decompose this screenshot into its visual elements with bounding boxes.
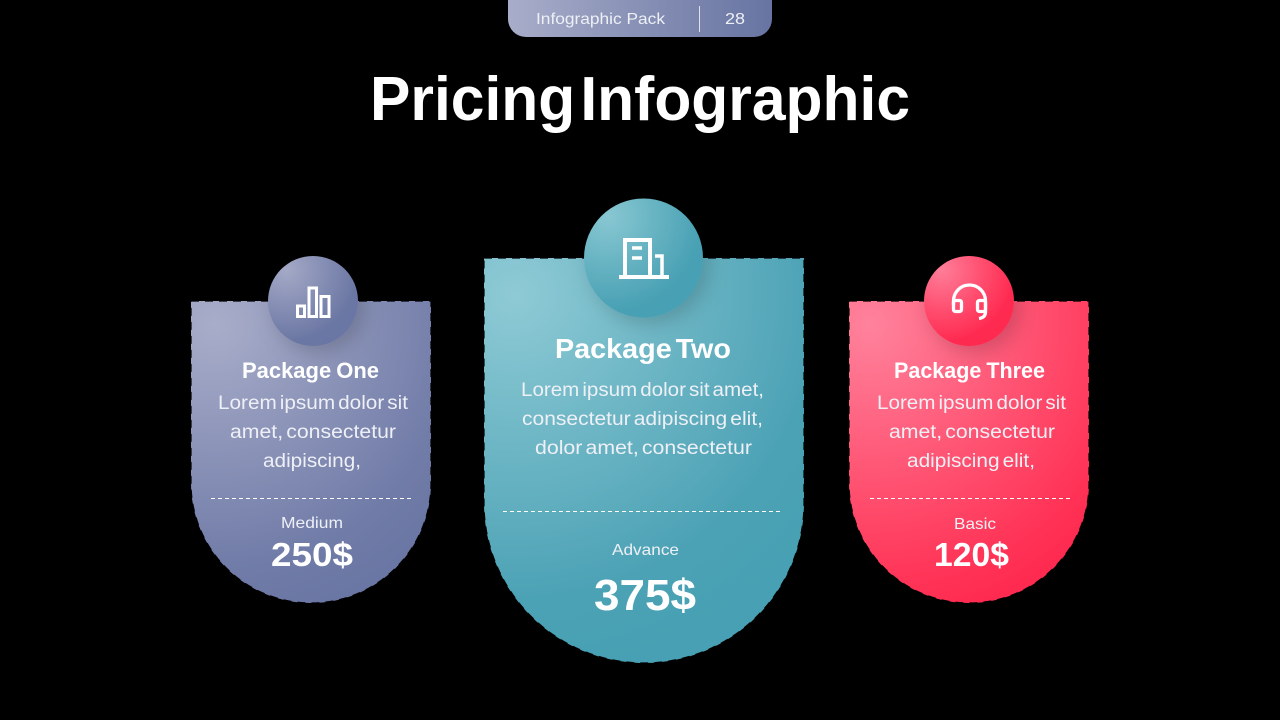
- icon: headset: [954, 285, 986, 318]
- tier label: advance: Advance: [612, 542, 679, 559]
- text block: package three: adipiscing elit,: [907, 451, 1035, 472]
- panel: package three: [849, 256, 1089, 603]
- panel: package two: [484, 198, 804, 663]
- text block: package two: consectetur adipiscing elit,: [522, 409, 763, 430]
- text block: package one: amet, consectetur: [230, 422, 397, 443]
- heading: package one: Package One: [242, 358, 379, 383]
- heading: package two: Package Two: [555, 333, 731, 364]
- text block: package one: Lorem ipsum dolor sit: [218, 393, 409, 414]
- text block: package three: Lorem ipsum dolor sit: [877, 393, 1067, 414]
- icon: bar chart: [298, 288, 329, 316]
- text block: package one: [218, 393, 409, 472]
- tab page number: 28: [725, 11, 745, 28]
- icon circle: package two: [584, 198, 703, 318]
- text block: package one: adipiscing,: [263, 451, 361, 472]
- price: 250$: 250$: [271, 536, 353, 573]
- tab label: Infographic Pack: [536, 11, 666, 28]
- heading: package three: Package Three: [894, 358, 1045, 383]
- text block: package three: [877, 393, 1067, 472]
- panel: package one: [191, 256, 431, 603]
- title: Pricing Infographic: [370, 65, 910, 134]
- icon circle: package three: [924, 256, 1014, 346]
- text block: package three: amet, consectetur: [889, 422, 1056, 443]
- price: 120$: 120$: [934, 536, 1009, 573]
- tier label: basic: Basic: [954, 516, 996, 533]
- tier label: medium: Medium: [281, 515, 343, 532]
- price: 375$: 375$: [594, 571, 696, 620]
- text block: package two: dolor amet, consectetur: [535, 438, 753, 459]
- top tab: [508, 0, 772, 37]
- text block: package two: Lorem ipsum dolor sit amet,: [521, 380, 764, 401]
- text block: package two: [521, 380, 764, 459]
- icon: building: [619, 240, 669, 277]
- icon circle: package one: [268, 256, 358, 346]
